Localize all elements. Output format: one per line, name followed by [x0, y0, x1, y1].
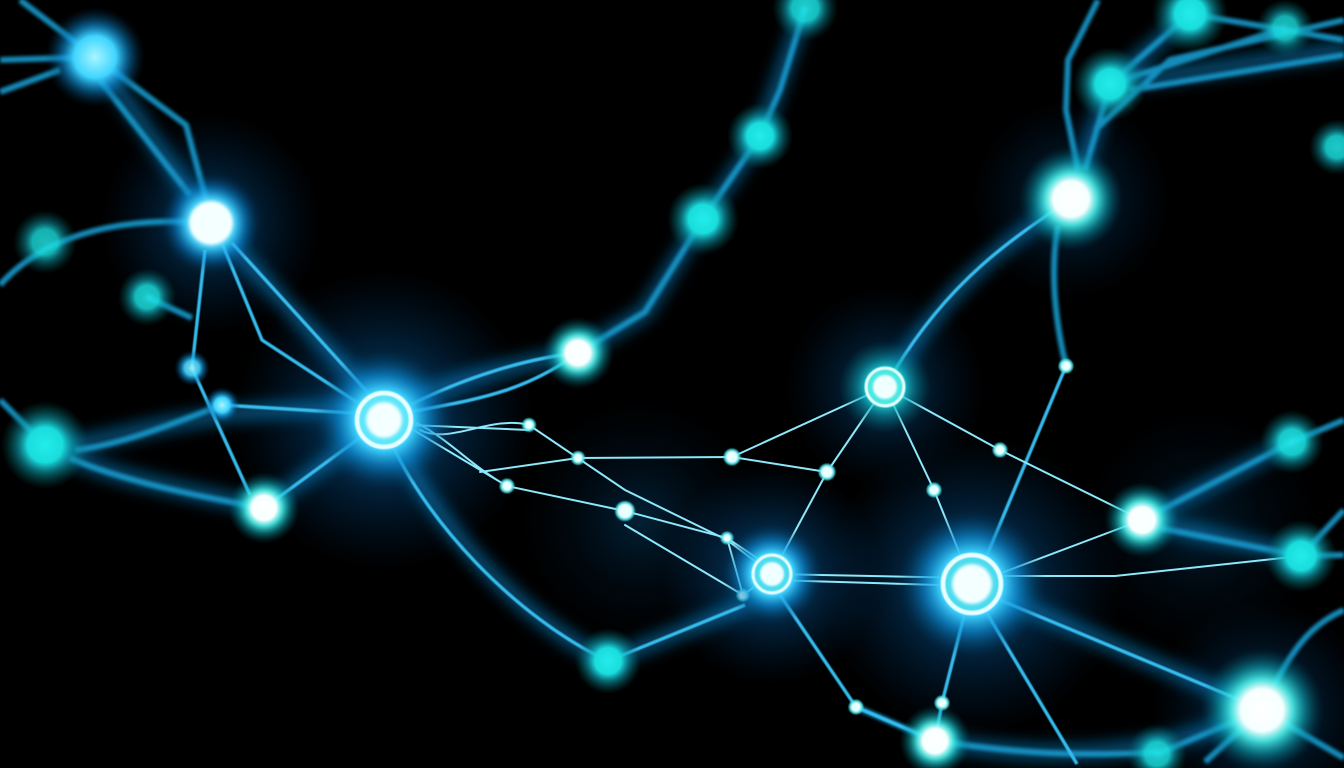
- node: upper right teal 2: [1152, 0, 1228, 52]
- node: small teal left: [118, 268, 176, 326]
- main blue connections: [192, 199, 1240, 764]
- node: centre ring: [722, 524, 822, 624]
- node: main ring hub right: [898, 510, 1046, 658]
- node: bottom teal: [1127, 724, 1187, 768]
- node: upper path teal 2: [727, 103, 793, 169]
- node: small blue: [174, 350, 210, 386]
- node: left teal: [13, 210, 77, 274]
- node: top centre ring: [839, 341, 931, 433]
- node: main ring hub left: [314, 350, 454, 490]
- node: upper path teal 1: [667, 183, 739, 255]
- node: upper left blue: [45, 7, 145, 107]
- node: upper right white: [1019, 147, 1123, 251]
- node: upper path teal 3: [772, 0, 838, 41]
- node: right teal lower: [1265, 520, 1337, 592]
- node: bottom centre teal: [575, 628, 641, 694]
- node: bottom white teal: [899, 705, 971, 768]
- node: small blue bright: [204, 387, 240, 423]
- node: upper right teal 3: [1256, 0, 1314, 57]
- node: upper right teal 1: [1073, 47, 1147, 121]
- node: lower right big: [1200, 648, 1324, 768]
- fine bright connections: [410, 387, 1301, 595]
- node: right edge teal: [1309, 119, 1344, 175]
- node: upper path white: [542, 317, 614, 389]
- node: lower left teal: [1, 401, 89, 489]
- node: left hub white: [161, 173, 261, 273]
- node: lower left white: [228, 472, 300, 544]
- node: right teal upper: [1260, 410, 1324, 474]
- small junction nodes: [501, 360, 1072, 713]
- node: right white: [1104, 482, 1180, 558]
